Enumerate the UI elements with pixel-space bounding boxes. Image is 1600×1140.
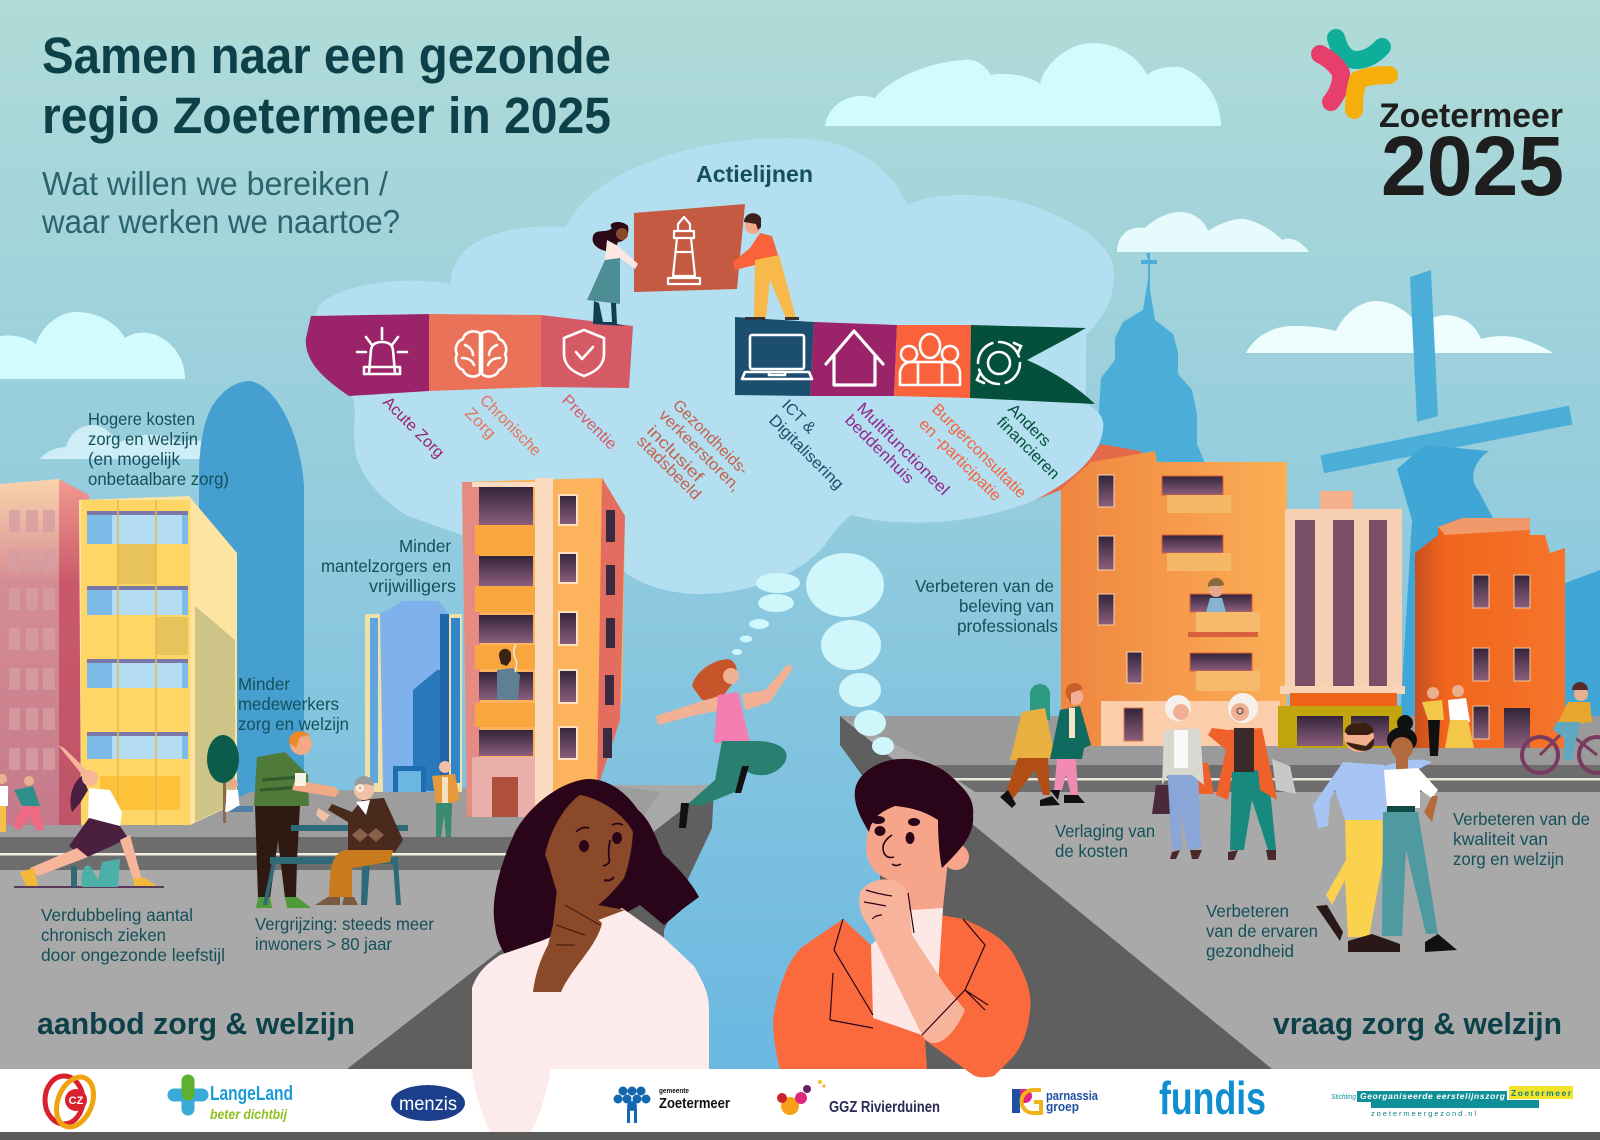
- note: minder medewerkers: medewerkers: [238, 694, 339, 714]
- label: gezondheidsverkeerstoren: inclusief: [643, 423, 707, 486]
- logo: LangeLand: beter dichtbij: [210, 1106, 288, 1122]
- heading: aanbod: aanbod zorg & welzijn: [37, 1006, 355, 1041]
- figure: couple woman: [1382, 715, 1457, 952]
- figure: bench: [263, 825, 408, 905]
- building: big orange right: [1035, 444, 1287, 746]
- footer band: [0, 1069, 1600, 1140]
- woman shirt: [472, 908, 709, 1132]
- logo: CZ: CZ: [69, 1095, 84, 1107]
- note: hogere kosten: onbetaalbare zorg): [88, 469, 229, 489]
- label: acute zorg: Acute Zorg: [379, 394, 447, 462]
- logo: GGZ Rivierduinen: [777, 1080, 940, 1116]
- cloud: left: [0, 312, 185, 379]
- banner: right segments: [735, 317, 1095, 404]
- figure: man lifting sign: [733, 213, 799, 320]
- title: Samen naar een gezonde: [42, 27, 611, 84]
- figure: older woman with bags: [1152, 695, 1214, 859]
- note: verdubbeling: chronisch zieken: [41, 925, 166, 945]
- woman hand: [533, 876, 602, 992]
- note: verdubbeling: Verdubbeling aantal: [41, 905, 193, 925]
- logo: gemeente Zoetermeer: gemeente: [659, 1086, 689, 1095]
- note: vergrijzing: Vergrijzing: steeds meer: [255, 914, 434, 934]
- logo: Parnassia groep: parnassia: [1046, 1089, 1099, 1103]
- note: kwaliteit: Verbeteren van de: [1453, 809, 1590, 829]
- note: verlaging kosten: Verlaging van: [1055, 821, 1155, 841]
- man jacket: [773, 910, 1030, 1077]
- note: beleving professionals: Verbeteren van de: [915, 576, 1054, 596]
- label: ict en digitalisering: ICT &: [778, 397, 819, 437]
- man hair: [855, 759, 973, 868]
- label: gezondheidsverkeerstoren: Gezondheids-: [669, 397, 751, 479]
- cloud: behind left text: [40, 425, 225, 459]
- figure: small pedestrians left: [0, 774, 44, 832]
- note: hogere kosten: Hogere kosten: [88, 409, 195, 429]
- cloud: top right: [825, 43, 1221, 126]
- sign: lighthouse panel: [634, 204, 745, 292]
- note: verdubbeling: [41, 905, 225, 965]
- label: multifunctioneel beddenhuis: Multifunctioneel: [853, 400, 952, 499]
- figure: woman with coffee: [1050, 683, 1091, 803]
- note: minder mantelzorgers: Minder: [399, 536, 451, 556]
- note: ervaren gezondheid: van de ervaren: [1206, 921, 1318, 941]
- label: gezondheidsverkeerstoren: verkeerstoren,: [655, 407, 744, 495]
- note: kwaliteit: zorg en welzijn: [1453, 849, 1564, 869]
- building: tall center: [462, 478, 625, 817]
- note: vergrijzing: inwoners > 80 jaar: [255, 934, 392, 954]
- label: burgerconsultatie: en -participatie: [915, 416, 1004, 505]
- building: blue glass tower: [365, 601, 462, 792]
- label: anders financieren: financieren: [993, 414, 1062, 483]
- figure: couple man: [1313, 722, 1432, 952]
- ground: left plaza: [0, 785, 714, 1069]
- note: verlaging kosten: de kosten: [1055, 841, 1128, 861]
- note: beleving professionals: [915, 576, 1058, 636]
- figure: tree and sitting person: [207, 735, 253, 823]
- note: minder medewerkers: [238, 674, 349, 734]
- logo: Parnassia groep: [1012, 1089, 1099, 1114]
- note: ervaren gezondheid: Verbeteren: [1206, 901, 1289, 921]
- note: kwaliteit: kwaliteit van: [1453, 829, 1548, 849]
- note: beleving professionals: beleving van: [959, 596, 1054, 616]
- logo: Georganiseerde eerstelijnszorg: Georganiseerde eerstelijnszorg: [1360, 1091, 1506, 1101]
- note: ervaren gezondheid: gezondheid: [1206, 941, 1294, 961]
- icon: brain: [456, 331, 506, 377]
- figure: couple in background: [1422, 685, 1474, 756]
- banner: left segments: [306, 314, 633, 396]
- label: multifunctioneel beddenhuis: beddenhuis: [841, 412, 917, 487]
- figure: woman in hijab: [1000, 684, 1060, 808]
- label: gezondheidsverkeerstoren: [633, 397, 751, 504]
- woman face: [545, 795, 633, 925]
- logo: gemeente Zoetermeer: Zoetermeer: [659, 1095, 730, 1112]
- man neck and face: [866, 790, 948, 910]
- logo: LangeLand: LangeLand: [210, 1083, 293, 1105]
- label: gezondheidsverkeerstoren: stadsbeeld: [633, 433, 704, 504]
- note: ervaren gezondheid: [1206, 901, 1318, 961]
- building: column entrance: [1278, 491, 1405, 748]
- logo: Georganiseerde eerstelijnszorg: zoetermeergezond.nl: [1371, 1109, 1476, 1118]
- silhouette: windmill: [1319, 270, 1600, 720]
- figure: woman at window: [1206, 578, 1226, 612]
- logo: Georganiseerde eerstelijnszorg: Stichting: [1331, 1092, 1357, 1101]
- logo: Georganiseerde eerstelijnszorg: [1331, 1086, 1573, 1118]
- figure: older woman orange coat: [1208, 693, 1296, 860]
- logo: Parnassia groep: groep: [1046, 1100, 1079, 1114]
- ground: right plaza: [840, 716, 1600, 1069]
- logo: Zoetermeer 2025: [1320, 38, 1564, 213]
- building: yellow: [79, 496, 237, 825]
- building: red right: [1415, 518, 1565, 748]
- figure: woman lifting sign: [587, 222, 638, 326]
- note: kwaliteit: [1453, 809, 1590, 869]
- subtitle: [41, 165, 400, 240]
- icon: group of people: [900, 334, 960, 385]
- man hand: [859, 879, 965, 1043]
- figure: old man with cane: [432, 761, 460, 837]
- thought bubbles: woman: [732, 573, 800, 655]
- logo: CZ: [45, 1072, 101, 1132]
- silhouette: left tower: [199, 381, 304, 830]
- logo: LangeLand: [174, 1081, 293, 1122]
- icon: shield: [564, 330, 604, 376]
- thought cloud: actielijnen: [306, 138, 1114, 594]
- figure: thinking woman: [472, 779, 709, 1132]
- banner labels: [379, 392, 1062, 505]
- logo: Menzis: [391, 1085, 465, 1121]
- logo: Menzis: menzis: [399, 1094, 457, 1115]
- icon: house: [826, 331, 883, 385]
- note: minder mantelzorgers: mantelzorgers en: [321, 556, 451, 576]
- icon: alarm beacon: [357, 328, 407, 374]
- icon: laptop: [742, 335, 812, 379]
- figure: cyclist: [1522, 682, 1600, 773]
- silhouette: church: [1095, 253, 1207, 478]
- label: anders financieren: Anders: [1004, 401, 1054, 450]
- note: vergrijzing: [255, 914, 434, 954]
- note: verlaging kosten: [1055, 821, 1155, 861]
- logo flower: [1320, 38, 1389, 110]
- note: minder medewerkers: zorg en welzijn: [238, 714, 349, 734]
- man ear: [943, 844, 969, 870]
- note: hogere kosten: zorg en welzijn: [88, 429, 198, 449]
- note: verdubbeling: door ongezonde leefstijl: [41, 945, 225, 965]
- man shirt: [871, 908, 943, 1035]
- logo: gemeente Zoetermeer: [614, 1086, 730, 1123]
- heading: vraag: vraag zorg & welzijn: [1273, 1006, 1562, 1041]
- logo: GGZ Rivierduinen: GGZ Rivierduinen: [829, 1099, 940, 1116]
- building: left pink: [0, 479, 89, 825]
- subtitle: waar werken we naartoe?: [41, 203, 400, 240]
- label: burgerconsultatie: Burgerconsultatie: [928, 401, 1029, 502]
- figure: standing carer: [254, 731, 339, 908]
- note: minder mantelzorgers: vrijwilligers: [369, 576, 456, 596]
- subtitle: Wat willen we bereiken /: [42, 165, 389, 202]
- logo: Georganiseerde eerstelijnszorg: Zoetermeer: [1511, 1088, 1572, 1098]
- icon: lighthouse: [668, 217, 700, 284]
- note: hogere kosten: [88, 409, 229, 489]
- heading: actielijnen: Actielijnen: [696, 161, 813, 187]
- figure: jumping woman: [656, 659, 793, 828]
- cloud: windmill: [1246, 301, 1553, 353]
- figure: seated old man: [315, 776, 403, 905]
- title: regio Zoetermeer in 2025: [42, 87, 611, 144]
- logo: Fundis: fundis: [1159, 1072, 1266, 1124]
- thought bubbles: man: [806, 553, 894, 755]
- label: chronische zorg: Chronische: [476, 392, 544, 460]
- note: minder mantelzorgers: [321, 536, 456, 596]
- note: hogere kosten: (en mogelijk: [88, 449, 180, 469]
- icon: circular arrows: [977, 342, 1021, 384]
- figure: yoga woman: [14, 745, 164, 887]
- woman hair: [494, 779, 699, 962]
- logo: Zoetermeer 2025: 2025: [1381, 119, 1564, 213]
- label: ict en digitalisering: Digitalisering: [765, 412, 846, 493]
- title: [42, 27, 611, 144]
- label: chronische zorg: Zorg: [461, 405, 499, 442]
- note: beleving professionals: professionals: [957, 616, 1058, 636]
- logo: Zoetermeer 2025: Zoetermeer: [1379, 97, 1563, 135]
- note: minder medewerkers: Minder: [238, 674, 290, 694]
- figure: thinking man: [773, 759, 1030, 1077]
- cloud: above church: [1117, 212, 1309, 252]
- figure: man smoking on balcony: [497, 644, 520, 700]
- label: preventie: Preventie: [558, 392, 620, 453]
